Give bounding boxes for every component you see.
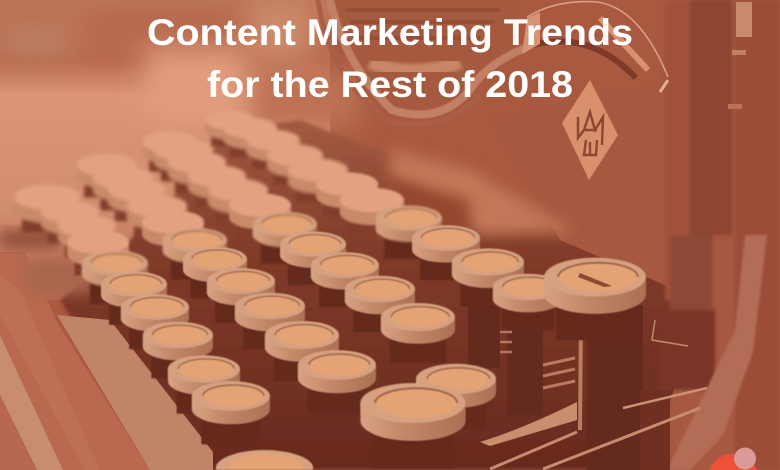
- smudge under diamond: [390, 150, 575, 235]
- lower right frame and rods: [468, 235, 767, 470]
- ribbon cover arc: [522, 2, 668, 92]
- decorative logo circles: [709, 448, 757, 470]
- emblem: diamond badge: [562, 80, 618, 180]
- title: for the Rest of 2018: [207, 64, 573, 105]
- dark keybed behind keys: [60, 120, 700, 470]
- left carriage rails: [0, 252, 150, 470]
- platen bowl: [330, 0, 520, 116]
- title: Content Marketing Trends: [147, 12, 633, 53]
- middle typewriter keys: [67, 172, 442, 304]
- right side machine body: [490, 0, 780, 470]
- title: [147, 12, 633, 105]
- front typewriter keys: [101, 225, 646, 470]
- arrow glyph on key: [578, 273, 612, 287]
- blurred rear typewriter keys: [14, 110, 348, 257]
